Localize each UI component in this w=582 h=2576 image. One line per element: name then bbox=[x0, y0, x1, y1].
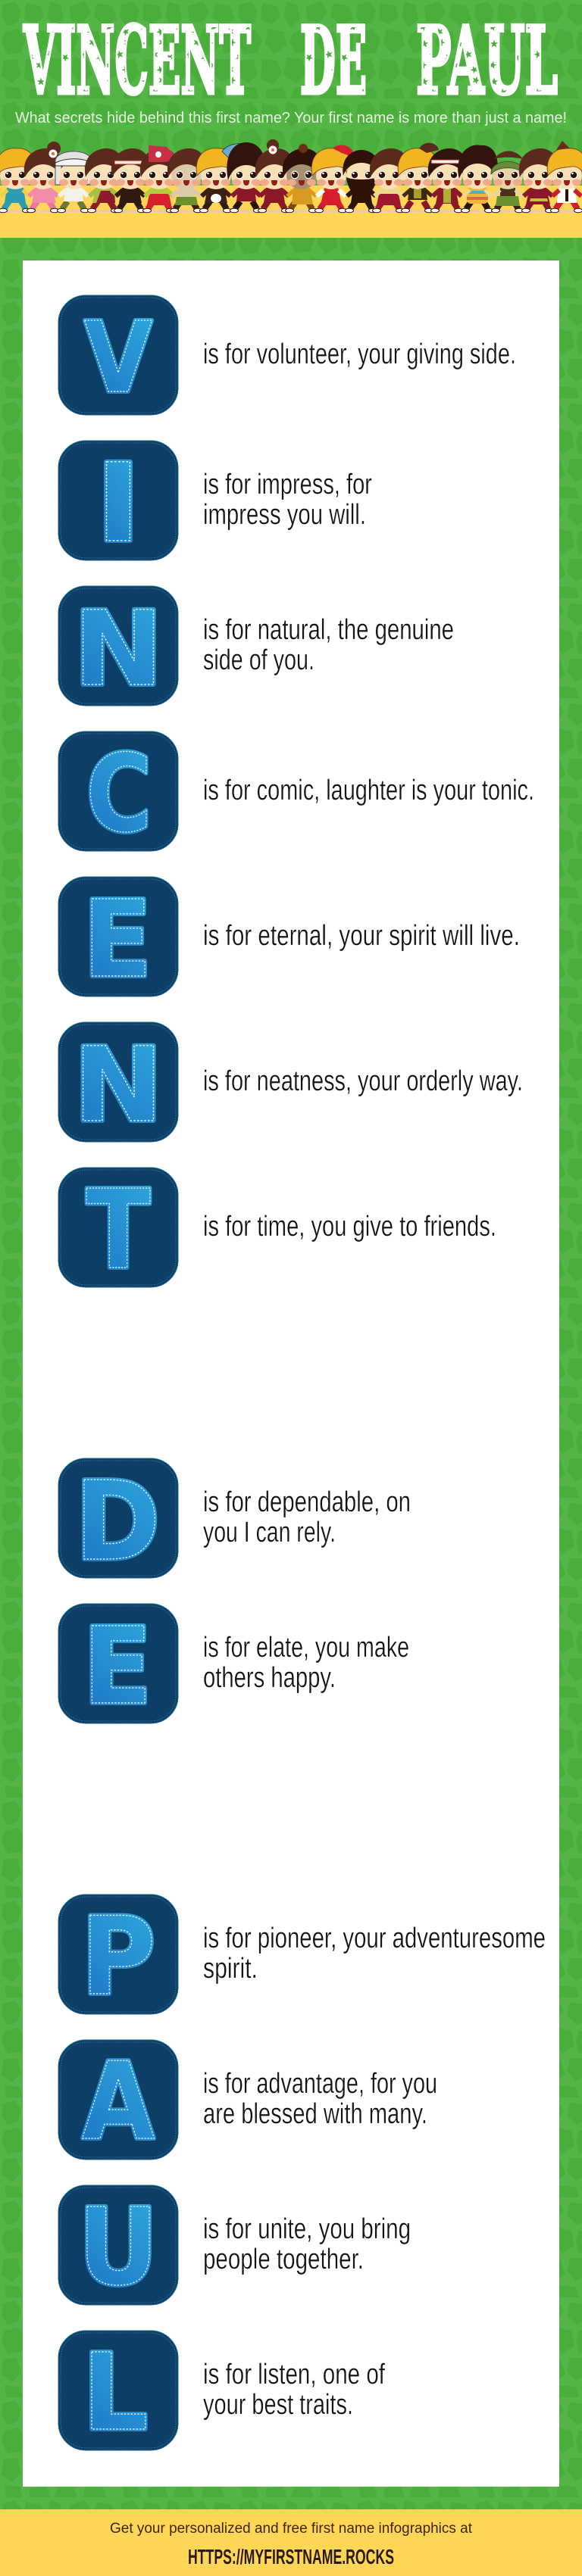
child 3 bbox=[55, 151, 92, 213]
ground strip bbox=[0, 210, 582, 213]
child 15 bbox=[398, 143, 439, 213]
tile A: A bbox=[82, 2040, 155, 2164]
row I bbox=[58, 440, 372, 566]
text N: is for natural, the genuine bbox=[203, 614, 454, 646]
child 8 bbox=[196, 144, 247, 213]
text L bbox=[203, 2359, 385, 2421]
child 20 bbox=[547, 141, 582, 213]
row L bbox=[58, 2331, 385, 2455]
child 14 bbox=[370, 148, 408, 213]
tile I: I bbox=[95, 440, 141, 566]
text A bbox=[203, 2068, 437, 2130]
tile C: C bbox=[86, 732, 152, 856]
text L: is for listen, one of bbox=[203, 2359, 385, 2390]
child 19 bbox=[519, 148, 558, 213]
text D bbox=[203, 1486, 411, 1548]
tile V bbox=[58, 295, 178, 415]
subtitle: What secrets hide behind this first name? Your first name is more than just a name! bbox=[15, 110, 567, 126]
child 18 bbox=[491, 151, 524, 213]
footer url: HTTPS://MYFIRSTNAME.ROCKS bbox=[188, 2545, 394, 2568]
tile I bbox=[58, 440, 178, 566]
row of cartoon children bbox=[0, 139, 582, 213]
child 11 bbox=[283, 144, 321, 213]
text D: is for dependable, on bbox=[203, 1486, 411, 1518]
tile T bbox=[58, 1166, 178, 1293]
tile V: V bbox=[84, 301, 152, 415]
tile E: E bbox=[83, 878, 152, 1002]
row E second bbox=[58, 1604, 409, 1729]
text E second: others happy. bbox=[203, 1662, 336, 1694]
tile E bbox=[58, 877, 178, 1002]
tile P: P bbox=[80, 1895, 156, 2019]
footer band bbox=[0, 2509, 582, 2576]
child 9 bbox=[227, 142, 266, 213]
tile U: U bbox=[78, 2186, 158, 2309]
yellow band bbox=[0, 186, 582, 238]
tile P: P bbox=[80, 1895, 156, 2019]
tile C: C bbox=[86, 732, 152, 856]
child 12 bbox=[311, 145, 354, 213]
text N bbox=[203, 614, 454, 676]
tile E second: E bbox=[83, 1605, 152, 1729]
tile U: U bbox=[78, 2186, 158, 2309]
tile L bbox=[58, 2331, 178, 2455]
row P bbox=[58, 1895, 546, 2019]
text U bbox=[203, 2213, 411, 2275]
text I: impress you will. bbox=[203, 499, 366, 531]
tile N bbox=[58, 586, 178, 709]
footer text: Get your personalized and free first name infographics at bbox=[110, 2521, 473, 2537]
text I bbox=[203, 469, 372, 531]
row A bbox=[58, 2040, 437, 2164]
row V bbox=[58, 295, 516, 415]
child 1 bbox=[0, 148, 35, 213]
child 7 bbox=[167, 148, 208, 213]
tile E second: E bbox=[83, 1605, 152, 1729]
title: DE bbox=[300, 7, 367, 116]
row N second bbox=[58, 1022, 523, 1146]
child 6 bbox=[140, 145, 179, 213]
child 10 bbox=[255, 139, 294, 213]
tile N second: N bbox=[73, 1026, 164, 1146]
text U: people together. bbox=[203, 2244, 364, 2275]
tile V: V bbox=[84, 301, 152, 415]
child 17 bbox=[458, 145, 498, 213]
child 13 bbox=[343, 150, 380, 213]
row N bbox=[58, 586, 454, 709]
text I: is for impress, for bbox=[203, 469, 372, 501]
row C bbox=[58, 731, 534, 856]
text P: spirit. bbox=[203, 1953, 258, 1985]
row U bbox=[58, 2185, 411, 2309]
text T: is for time, you give to friends. bbox=[203, 1211, 496, 1243]
row T bbox=[58, 1166, 496, 1293]
text E second: is for elate, you make bbox=[203, 1632, 409, 1664]
tile C bbox=[58, 731, 178, 856]
row E bbox=[58, 877, 520, 1002]
text A: is for advantage, for you bbox=[203, 2068, 437, 2100]
text N: side of you. bbox=[203, 644, 314, 676]
tile T: T bbox=[86, 1166, 150, 1293]
child 4 bbox=[85, 148, 124, 213]
tile D: D bbox=[74, 1458, 161, 1585]
tile N second bbox=[58, 1022, 178, 1146]
tile E: E bbox=[83, 878, 152, 1002]
tile N: N bbox=[73, 590, 164, 709]
tile N second: N bbox=[73, 1026, 164, 1146]
text U: is for unite, you bring bbox=[203, 2213, 411, 2245]
tile N: N bbox=[73, 590, 164, 709]
text P bbox=[203, 1923, 546, 1985]
text E second bbox=[203, 1632, 409, 1694]
text D: you I can rely. bbox=[203, 1517, 336, 1548]
tile I: I bbox=[95, 440, 141, 566]
text A: are blessed with many. bbox=[203, 2098, 427, 2130]
tile L: L bbox=[82, 2331, 149, 2455]
tile L: L bbox=[82, 2331, 149, 2455]
child 16 bbox=[428, 148, 467, 213]
tile A bbox=[58, 2040, 178, 2164]
tile D: D bbox=[74, 1458, 161, 1585]
text L: your best traits. bbox=[203, 2389, 353, 2421]
tile P bbox=[58, 1895, 178, 2019]
row D bbox=[58, 1458, 411, 1585]
white panel bbox=[23, 260, 559, 2487]
child 5 bbox=[111, 148, 150, 213]
title: VINCENT bbox=[23, 7, 251, 116]
child 2 bbox=[24, 142, 63, 213]
tile A: A bbox=[82, 2040, 155, 2164]
tile E second bbox=[58, 1604, 178, 1729]
tile T: T bbox=[86, 1166, 150, 1293]
